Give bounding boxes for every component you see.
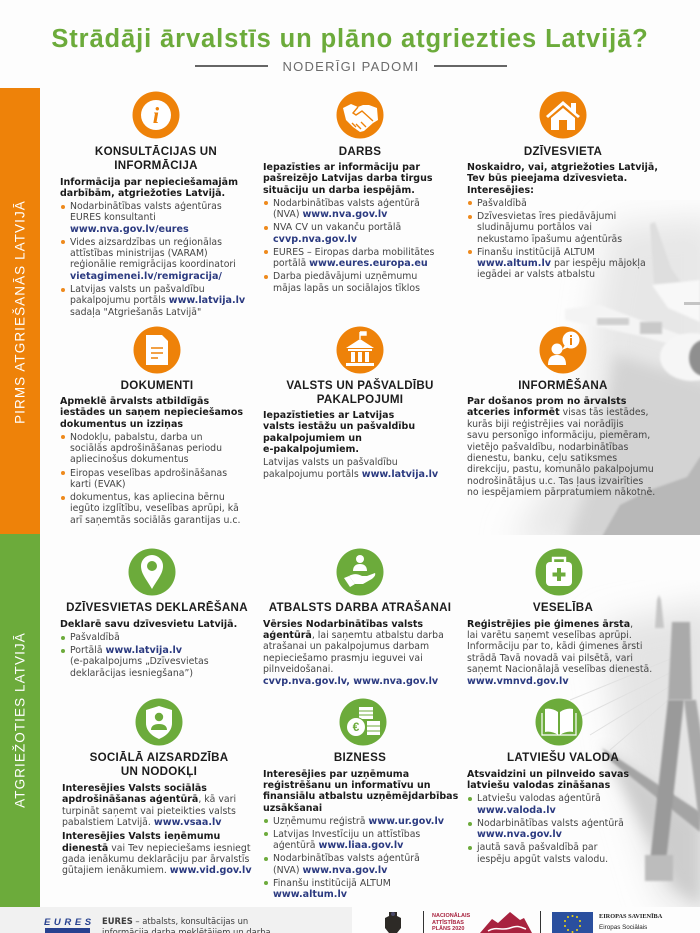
heading: BIZNESS: [334, 751, 386, 764]
text: Pašvaldībā: [70, 632, 120, 643]
text: [60, 176, 245, 318]
text: [263, 162, 434, 294]
text: Informāciju par to, kādi ģimenes ārsti: [467, 641, 642, 652]
heading: VESELĪBA: [533, 601, 593, 614]
text: uzsākšanai: [263, 803, 322, 814]
panel: health: [467, 548, 652, 687]
text: Finanšu institūcijā ALTUM: [477, 247, 595, 258]
text: Nodarbinātības valsts aģentūrā: [273, 198, 420, 209]
text: turpināt saņemt vai pieteikties valsts: [62, 806, 236, 817]
text: pabalstiem Latvijā. www.vsaa.lv: [62, 817, 222, 828]
logo: EURES: [44, 917, 92, 933]
panel: documents: [60, 326, 243, 526]
text: www.altum.lv: [273, 889, 347, 900]
text: EURES konsultanti: [70, 212, 156, 223]
icon: first aid kit: [536, 548, 582, 596]
panel: job search support: [263, 548, 451, 687]
panel: business: [263, 698, 458, 900]
text: iegādei ar valsts atbalstu: [477, 269, 595, 280]
text: Interesējies par uzņēmuma: [263, 768, 409, 780]
text: Latviešu valodas aģentūrā: [477, 793, 601, 804]
text: pilnveidošanai.: [263, 664, 333, 675]
text: Nodokļu, pabalstu, darba un: [70, 432, 202, 443]
text: Tev būs pieejama dzīvesvieta.: [467, 173, 627, 184]
heading: [95, 145, 217, 172]
text: kurās biji reģistrējies vai norādījis: [467, 419, 624, 430]
icon: open book: [535, 698, 583, 746]
text: jautā savā pašvaldībā par: [477, 842, 597, 853]
icon: handshake: [336, 92, 384, 138]
text: Vērsies Nodarbinātības valsts: [263, 618, 423, 630]
text: Dzīvesvietas īres piedāvājumi: [477, 211, 616, 222]
text: www.altum.lv par iespēju mājokļa: [477, 258, 646, 269]
text: Latvijas valsts un pašvaldību: [263, 457, 398, 468]
text: arī saņemtās sociālās garantijas u.c.: [70, 515, 240, 526]
text: Pašvaldībā: [477, 198, 527, 209]
text: pašreizējo Latvijas darba tirgus: [263, 173, 433, 184]
text: gada ienākumu deklarāciju par ārvalstīs: [62, 854, 249, 865]
logo: national development plan: PLĀNS 2020: [432, 926, 464, 932]
text: atceries informēt visas tās iestādes,: [467, 407, 649, 418]
text: Reģistrējies pie ģimenes ārsta,: [467, 618, 633, 630]
text: [467, 162, 658, 280]
text: aģentūrā www.liaa.gov.lv: [273, 840, 403, 851]
heading: LATVIEŠU VALODA: [507, 751, 619, 764]
divider: [423, 911, 424, 933]
text: Eiropas veselības apdrošināšanas: [70, 468, 227, 479]
text: Par došanos prom no ārvalsts: [467, 396, 626, 407]
text: [263, 618, 444, 687]
heading: [90, 751, 228, 778]
text: pakalpojumu portāls www.latvija.lv: [263, 469, 438, 480]
text: savu personīgo informāciju, piemēram,: [467, 430, 650, 441]
text: iestādes un saņem nepieciešamos: [60, 407, 243, 418]
text: [467, 769, 629, 867]
text: Latvijas Investīciju un attīstības: [273, 829, 420, 840]
sidebar: before returning: PIRMS ATGRIEŠANĀS LATVIJĀ: [12, 200, 28, 424]
text: sludinājumu portālos vai: [477, 222, 592, 233]
text: EURES description: [102, 916, 271, 933]
text: [467, 618, 652, 687]
text: attīstības ministrijas (VARAM): [70, 248, 208, 259]
text: Nodarbinātības valsts aģentūras: [70, 201, 222, 212]
text: e-pakalpojumiem.: [263, 444, 359, 455]
text: dokumentus un izziņas: [60, 419, 183, 430]
text: www.nva.gov.lv/eures: [70, 224, 189, 235]
text: apliecinošus dokumentus: [70, 454, 189, 465]
text: latviešu valodas zināšanas: [467, 780, 610, 791]
icon: house: [540, 92, 586, 138]
text: iespēju apgūt valsts valodu.: [477, 854, 608, 865]
text: Uzņēmumu reģistrā www.ur.gov.lv: [273, 816, 444, 827]
text: Interesējies:: [467, 185, 534, 196]
heading: VALSTS UN PAŠVALDĪBU: [286, 379, 434, 392]
text: reģistrēšanu un informatīvu un: [263, 780, 431, 791]
background photo: cable-stayed bridge: [570, 595, 700, 907]
background photo: airplane: [520, 213, 700, 535]
panel: social protection and taxes: [62, 698, 252, 876]
logo: EURES: EURES: [44, 917, 95, 928]
panel: declaration of residence: [60, 548, 248, 679]
text: Vides aizsardzības un reģionālas: [70, 237, 222, 248]
text: Portālā www.latvija.lv: [70, 645, 182, 656]
text: strādā Tavā novadā vai pilsētā, vari: [467, 653, 633, 664]
text: dienestā vai Tev nepieciešams iesniegt: [62, 843, 251, 854]
text: Apmeklē ārvalsts atbildīgās: [60, 396, 209, 407]
heading: DZĪVESVIETAS DEKLARĒŠANA: [66, 601, 248, 614]
icon: person with speech bubble: [540, 326, 586, 374]
text: pakalpojumiem un: [263, 433, 362, 444]
heading: SOCIĀLĀ AIZSARDZĪBA: [90, 751, 228, 764]
text: lai varētu saņemt veselības aprūpi.: [467, 630, 632, 641]
logo: coat of arms: [381, 912, 405, 933]
text: cvvp.nva.gov.lv, www.nva.gov.lv: [263, 676, 438, 687]
panel: housing: [467, 92, 658, 280]
icon: document: [134, 326, 180, 374]
text: European Union label: EIROPAS SAVIENĪBA: [599, 913, 662, 920]
text: nekustamo īpašumu aģentūrās: [477, 234, 622, 245]
icon: shield with person: [136, 698, 182, 746]
text: darbībām, atgriežoties Latvijā.: [60, 188, 225, 199]
text: [60, 396, 243, 526]
text: dienestu, banku, ceļu satiksmes: [467, 453, 617, 464]
panel: Latvian language: [467, 698, 629, 865]
text: sadaļa "Atgriešanās Latvijā": [70, 307, 201, 318]
text: Interesējies Valsts ieņēmumu: [62, 831, 220, 842]
text: European Union label: [599, 911, 662, 933]
panel: state and municipal services: [263, 326, 438, 480]
text: valsts iestāžu un pašvaldību: [263, 421, 415, 432]
text: karti (EVAK): [70, 479, 126, 490]
panel: consultations: [60, 92, 245, 318]
text: (NVA) www.nva.gov.lv: [273, 209, 387, 220]
text: nodrošinātājus u.c. Tas ļaus izvairīties: [467, 476, 643, 487]
text: Interesējies Valsts sociālās: [62, 783, 207, 794]
icon: hand holding person: [336, 548, 384, 596]
icon: info: i: [153, 103, 160, 128]
logo: national development plan: [432, 912, 532, 933]
text: Nodarbinātības valsts aģentūrā: [477, 818, 624, 829]
panel: informing: [467, 326, 655, 498]
text: portālā www.eures.europa.eu: [273, 258, 428, 269]
sidebar: when returning: ATGRIEŽOTIES LATVIJĀ: [12, 632, 28, 808]
text: iegūto izglītību, veselības aprūpi, kā: [70, 503, 239, 514]
text: atrašanai un pakalpojumus darbam: [263, 641, 429, 652]
text: finansiālu atbalstu uzņēmējdarbības: [263, 791, 458, 802]
text: sociālās apdrošināšanas periodu: [70, 443, 222, 454]
text: deklarācijas iesniegšana”): [70, 668, 193, 679]
text: [263, 410, 438, 480]
text: Iepazīsties ar informāciju par: [263, 162, 420, 173]
heading: [286, 378, 434, 406]
text: direkciju, pastu, komunālo pakalpojumu: [467, 464, 654, 475]
heading: DZĪVESVIETA: [524, 145, 602, 158]
subtitle with rules: NODERĪGI PADOMI: [283, 59, 419, 74]
heading: UN NODOKĻI: [121, 765, 197, 778]
text: European Union label: Eiropas Sociālais: [599, 924, 647, 931]
heading: INFORMĒŠANA: [518, 379, 608, 392]
text: vietējo pašvaldību, nodarbinātības: [467, 442, 628, 453]
heading: DARBS: [339, 145, 381, 158]
panel: work: [263, 92, 434, 294]
title: Strādāji ārvalstīs un plāno atgriezties Latvijā?: [51, 25, 649, 53]
heading: PAKALPOJUMI: [317, 393, 403, 406]
text: NVA CV un vakanču portālā: [273, 222, 401, 233]
text: apdrošināšanas aģentūrā, kā vari: [62, 794, 236, 805]
text: [467, 396, 655, 498]
text: dokumentus, kas apliecina bērnu: [70, 492, 225, 503]
text: EURES – Eiropas darba mobilitātes: [273, 247, 434, 258]
text: Nodarbinātības valsts aģentūrā: [273, 853, 420, 864]
text: mājas lapās un sociālajos tīklos: [273, 283, 420, 294]
logo: national development plan: ATTĪSTĪBAS: [432, 920, 464, 926]
logo: EU flag: [552, 912, 593, 933]
text: Noskaidro, vai, atgriežoties Latvijā,: [467, 162, 658, 173]
icon: map pin: [128, 548, 176, 596]
text: www.vmnvd.gov.lv: [467, 676, 569, 687]
icon: coins with euro: €: [353, 720, 360, 734]
text: [263, 768, 458, 900]
text: pakalpojumu portāls www.latvija.lv: [70, 295, 245, 306]
text: Iepazīstieties ar Latvijas: [263, 410, 394, 421]
text: (e-pakalpojums „Dzīvesvietas: [70, 656, 209, 667]
text: reģionālie remigrācijas koordinatori: [70, 259, 236, 270]
text: www.nva.gov.lv: [477, 829, 562, 840]
text: Informācija par nepieciešamajām: [60, 176, 238, 188]
sidebar: when returning: [0, 534, 40, 907]
icon: coins with euro: [340, 698, 386, 746]
text: Latvijas valsts un pašvaldību: [70, 284, 205, 295]
heading: INFORMĀCIJA: [114, 159, 198, 172]
text: www.valoda.lv: [477, 805, 556, 816]
divider: [540, 911, 541, 933]
text: Finanšu institūcijā ALTUM: [273, 878, 391, 889]
logo: national development plan: NACIONĀLAIS: [432, 913, 470, 919]
text: saņemt Nacionālajā veselības dienestā.: [467, 664, 652, 675]
text: Atsvaidzini un pilnveido savas: [467, 769, 629, 780]
text: vietagimenei.lv/remigracija/: [70, 271, 222, 282]
text: gūtajiem ienākumiem. www.vid.gov.lv: [62, 865, 252, 876]
text: nepieciešamo prasmju ieguvei vai: [263, 653, 423, 664]
text: Deklarē savu dzīvesvietu Latvijā.: [60, 619, 237, 630]
sidebar: before returning: [0, 88, 40, 534]
text: EURES description: EURES – atbalsts, konsultācijas un: [102, 916, 248, 926]
heading: ATBALSTS DARBA ATRAŠANAI: [269, 601, 451, 614]
text: Darba piedāvājumi uzņēmumu: [273, 271, 417, 282]
icon: public building: [336, 326, 384, 374]
heading: DOKUMENTI: [121, 379, 193, 392]
footer: EURES band: [0, 907, 352, 933]
icon: info: [132, 92, 180, 138]
text: situāciju un darba iespējām.: [263, 185, 415, 196]
text: no iespējamiem pārpratumiem nākotnē.: [467, 487, 655, 498]
text: (NVA) www.nva.gov.lv: [273, 865, 387, 876]
heading: KONSULTĀCIJAS UN: [95, 145, 217, 158]
text: aģentūrā, lai saņemtu atbalstu darba: [263, 630, 444, 641]
text: cvvp.nva.gov.lv: [273, 234, 357, 245]
text: [60, 619, 237, 679]
text: [62, 783, 252, 876]
